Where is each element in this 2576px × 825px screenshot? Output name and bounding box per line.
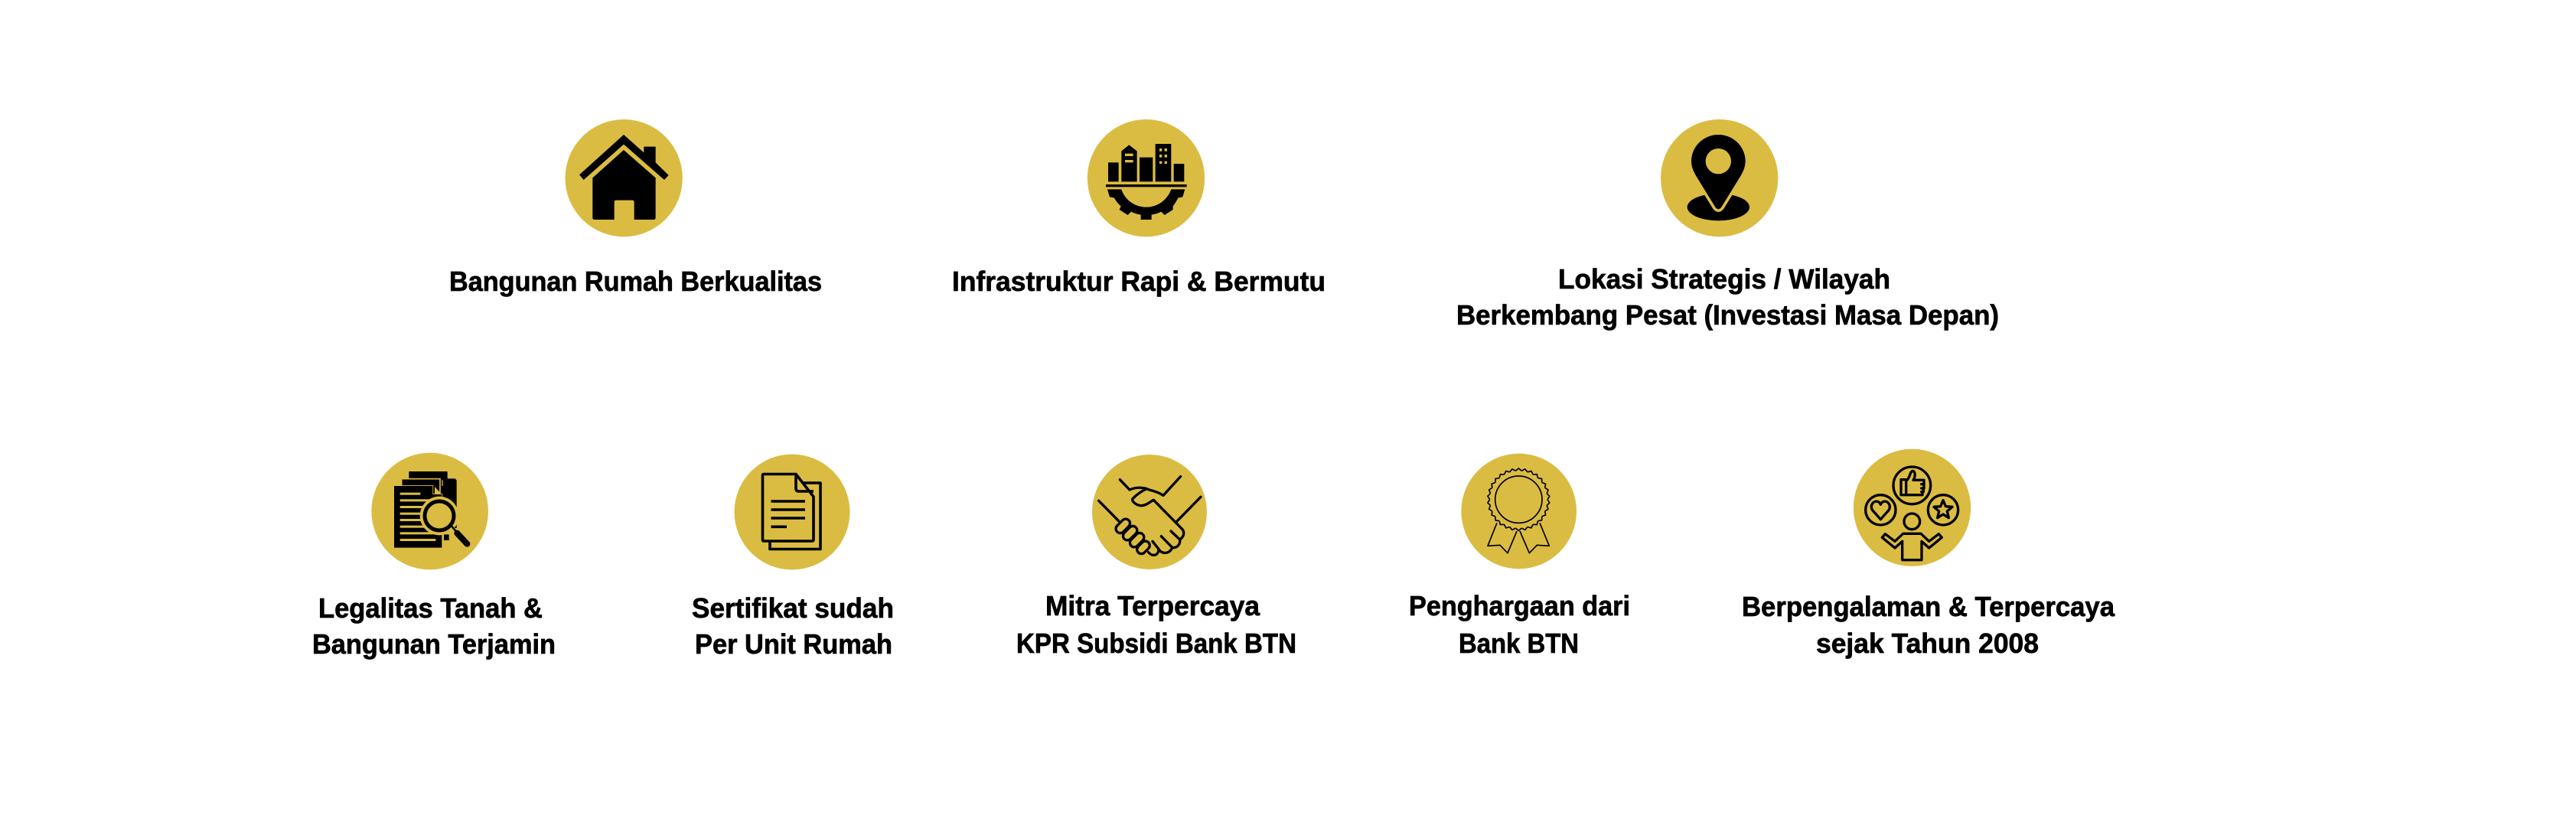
label: certificate: [692, 592, 894, 660]
label: trusted partner: KPR Subsidi Bank BTN: [1016, 628, 1296, 659]
label: strategic location: Lokasi Strategis / Wilayah: [1558, 263, 1890, 295]
icon: map pin: [1661, 119, 1778, 236]
panel: infrastructure: [952, 119, 1325, 297]
label: certificate: Per Unit Rumah: [695, 628, 892, 660]
icon: document sheets: [735, 455, 849, 569]
label: trusted partner: [1016, 590, 1296, 659]
panel: experience: [1742, 449, 2115, 659]
icon: person with like, heart and star: [1854, 449, 1971, 566]
icon: house: [565, 119, 683, 236]
label: legal: Bangunan Terjamin: [312, 628, 556, 660]
icon: rosette: [1461, 454, 1577, 569]
label: experience: [1742, 591, 2115, 659]
panel: trusted partner: [1016, 455, 1296, 659]
label: award: Penghargaan dari: [1409, 590, 1630, 621]
label: certificate: Sertifikat sudah: [692, 592, 894, 624]
icon: documents with magnifier: [371, 453, 488, 569]
label: infrastructure: Infrastruktur Rapi & Bermutu: [952, 266, 1325, 297]
label: legal: Legalitas Tanah &: [318, 592, 543, 624]
label: trusted partner: Mitra Terpercaya: [1045, 590, 1260, 621]
label: legal: [312, 592, 556, 660]
label: quality house: Bangunan Rumah Berkualitas: [449, 266, 822, 297]
label: experience: sejak Tahun 2008: [1816, 628, 2039, 659]
label: strategic location: Berkembang Pesat (Investasi Masa Depan): [1456, 299, 1999, 331]
label: award: [1409, 590, 1630, 659]
panel: strategic location: [1456, 119, 1999, 331]
label: award: Bank BTN: [1459, 628, 1579, 659]
panel: legal: [312, 453, 556, 660]
panel: award: [1409, 454, 1630, 659]
icon: handshake: [1092, 455, 1207, 569]
panel: quality house: [449, 119, 822, 297]
icon: city on gear: [1087, 119, 1205, 236]
label: experience: Berpengalaman & Terpercaya: [1742, 591, 2115, 622]
panel: certificate: [692, 455, 894, 660]
label: strategic location: [1456, 263, 1999, 331]
